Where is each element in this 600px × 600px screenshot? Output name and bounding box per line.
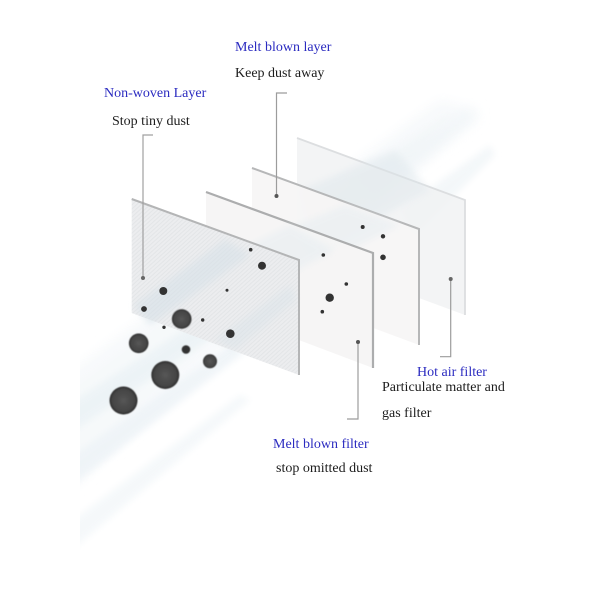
label: hot air filter: Hot air filter [417, 365, 487, 380]
leader line: melt blown filter [347, 340, 360, 419]
particles on melt blown filter [320, 253, 348, 314]
dust particles [110, 309, 217, 414]
label: melt blown layer: Melt blown layer [235, 40, 332, 55]
label: non-woven layer: Non-woven Layer [104, 86, 207, 101]
label: hot air filter: gas filter [382, 406, 432, 421]
background air flow streaks [80, 109, 491, 538]
particles on non-woven layer [141, 248, 266, 338]
label: melt blown layer: Keep dust away [235, 66, 324, 81]
label: melt blown layer [235, 40, 332, 81]
label: hot air filter: Particulate matter and [382, 380, 505, 395]
panel: melt blown layer [252, 168, 419, 345]
panel: hot air filter (back layer) [297, 138, 465, 315]
panel: melt blown filter [206, 192, 373, 368]
label: non-woven layer: Stop tiny dust [112, 114, 190, 129]
leader line: hot air filter [440, 277, 453, 357]
leader line: non-woven layer [141, 135, 153, 280]
label: non-woven layer [104, 86, 207, 129]
particles on melt blown layer [361, 225, 386, 260]
label: hot air filter [382, 365, 505, 421]
panel: non-woven layer (front) [132, 199, 299, 375]
leader line: melt blown layer [274, 93, 287, 198]
label: melt blown filter: Melt blown filter [273, 437, 369, 452]
infographic: filter layer diagram [80, 42, 505, 538]
label: melt blown filter [273, 437, 373, 476]
label: melt blown filter: stop omitted dust [276, 461, 373, 476]
